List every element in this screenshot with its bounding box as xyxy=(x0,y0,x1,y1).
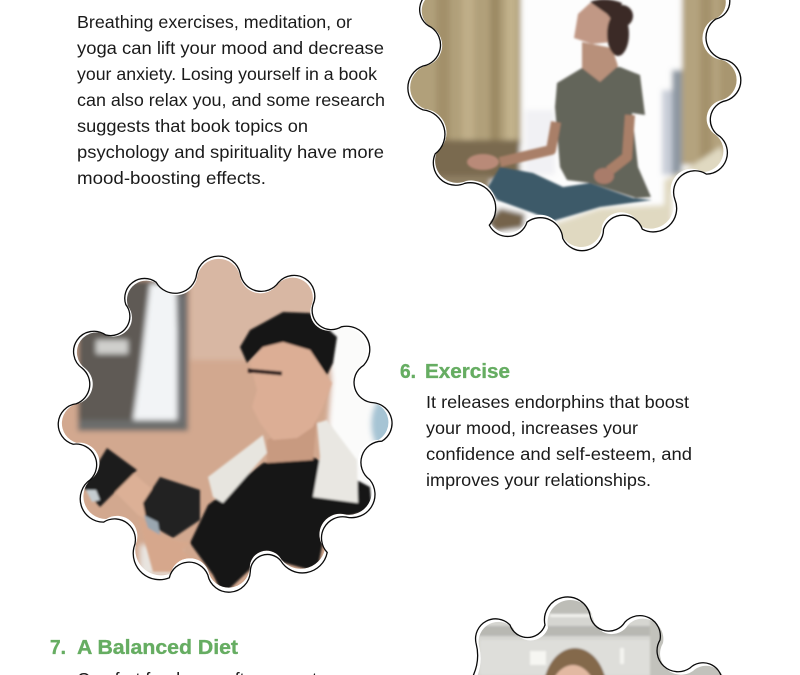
text block: relaxation techniques: can also relax you, and some research xyxy=(77,90,385,110)
photo: man lifting dumbbell in wavy frame xyxy=(50,250,400,600)
wavy outline xyxy=(471,597,730,675)
text block: relaxation techniques: Breathing exercises, meditation, or xyxy=(77,12,352,32)
text block: relaxation techniques xyxy=(77,12,385,188)
wavy outline xyxy=(58,256,392,592)
photo: woman in kitchen in wavy frame, cropped at page edge xyxy=(470,595,730,675)
text block: exercise: confidence and self-esteem, and xyxy=(426,444,692,464)
text block: relaxation techniques: suggests that book topics on xyxy=(77,116,308,136)
text block: relaxation techniques: yoga can lift your mood and decrease xyxy=(77,38,384,58)
text block: relaxation techniques: psychology and spirituality have more xyxy=(77,142,384,162)
text block: exercise xyxy=(426,392,692,490)
heading: 7. A Balanced Diet: A Balanced Diet xyxy=(77,636,238,659)
wavy outline xyxy=(408,0,741,251)
text block: relaxation techniques: mood-boosting effects. xyxy=(77,168,266,188)
heading: 6. Exercise: Exercise xyxy=(425,360,510,383)
photo: woman meditating in wavy frame xyxy=(400,0,752,260)
text block: exercise: your mood, increases your xyxy=(426,418,638,438)
text block: exercise: improves your relationships. xyxy=(426,470,651,490)
heading: 6. Exercise: 6. xyxy=(400,360,416,383)
heading: 7. A Balanced Diet: 7. xyxy=(50,636,66,659)
text block: exercise: It releases endorphins that boost xyxy=(426,392,689,412)
text block: relaxation techniques: your anxiety. Losing yourself in a book xyxy=(77,64,377,84)
